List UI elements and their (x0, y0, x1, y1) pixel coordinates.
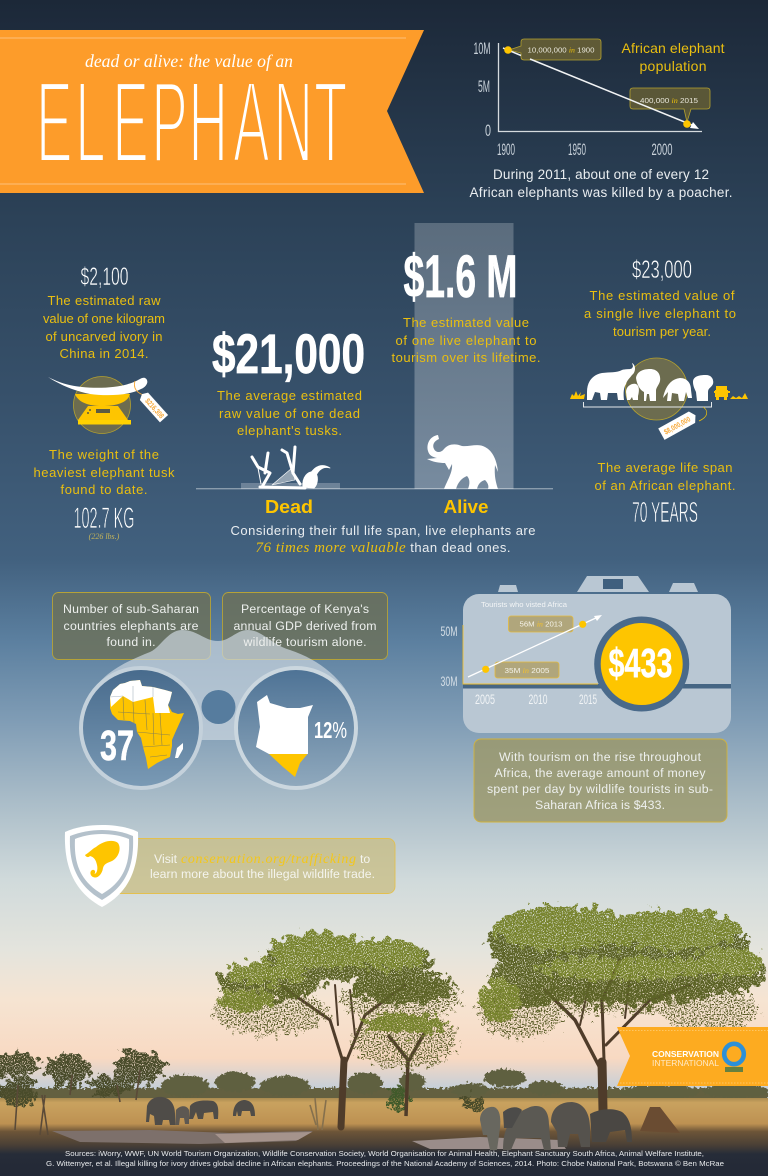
spending text (487, 750, 713, 812)
panel: tourism value column: 70 YEARS (632, 497, 698, 529)
y axis labels (440, 623, 458, 689)
callout text: Kenya GDP (234, 602, 376, 649)
map: Kenya (256, 695, 313, 777)
call to action (65, 825, 395, 907)
comparison statement: Considering their full life span, live elephants are (230, 523, 536, 538)
callout text: countries: countries elephants are (64, 619, 199, 633)
y axis labels: 10M (474, 39, 490, 58)
description: The average estimated (217, 388, 362, 403)
icon: shield with elephant head (65, 825, 138, 907)
baseline (196, 488, 553, 489)
poaching statement: During 2011, about one of every 12 (493, 167, 709, 182)
bridge hinge (202, 690, 236, 724)
link text (150, 852, 375, 881)
banner inner rule lines (0, 38, 406, 184)
life span description: The average life span (598, 460, 732, 475)
data points (482, 621, 586, 673)
unit conversion: (226 lbs.) (89, 532, 120, 541)
x axis labels: 2000 (652, 140, 672, 159)
chart title: population (640, 58, 706, 74)
ivory description: of uncarved ivory in (46, 329, 162, 344)
termite mound (640, 1107, 680, 1133)
icon: tusk on a scale with price tag: $216,308 (143, 396, 166, 420)
data points (504, 46, 691, 128)
callout: average tourist spending (474, 739, 727, 822)
binocular body (84, 630, 355, 740)
figure: 12%: 12% (314, 717, 347, 743)
figure: $1.6 M: $1.6 M (404, 243, 518, 310)
panel: ivory value column (34, 263, 175, 541)
y axis labels: 5M (478, 77, 490, 96)
callout text: Kenya GDP: annual GDP derived from (234, 619, 376, 633)
icon: live elephant (427, 435, 498, 489)
sources: Sources: iWorry, WWF, UN World Tourism Organization, Wildlife Conservation Society, World Organisation for Animal Health, Elephant Sanctuary South Africa, Animal Welfare Institute, (65, 1149, 704, 1158)
callout box: Kenya GDP (222, 592, 388, 660)
description (392, 315, 540, 365)
callout box: countries (52, 592, 210, 660)
callout: 400,000 in 2015 (630, 88, 710, 122)
logo mark (724, 1044, 744, 1072)
ivory description (43, 293, 165, 361)
x axis labels: 2015 (579, 691, 597, 707)
tag string (699, 407, 707, 421)
description (217, 388, 362, 438)
ivory description: The estimated raw (48, 293, 161, 308)
poaching statement: African elephants was killed by a poacher. (470, 185, 732, 200)
grass (570, 391, 748, 399)
figure: $21,000: $21,000 (212, 322, 365, 385)
description: of one live elephant to (396, 333, 536, 348)
chart title: Tourists who visted Africa (481, 600, 568, 609)
description: tourism per year. (613, 324, 711, 339)
description: a single live elephant to (584, 306, 736, 321)
tusk weight description: heaviest elephant tusk (34, 465, 175, 480)
callout text: countries (63, 602, 199, 649)
ground (0, 1098, 768, 1176)
spending text: Saharan Africa is $433. (535, 798, 665, 812)
decline line with arrow (503, 48, 699, 129)
y axis labels: 50M (440, 623, 458, 639)
panel: live elephant value (392, 223, 540, 517)
left acacia trunk and branches (280, 985, 405, 1127)
sources: G. Wittemyer, et al. Illegal killing for ivory drives global decline in African elephants. Proceedings of the National Academy of Sciences, 2014. Photo: Chobe National Park, Botswana © Ben McRae (46, 1159, 724, 1168)
camera stripe (463, 684, 731, 688)
panel: tourism value column (570, 256, 748, 529)
short value bar (241, 483, 340, 489)
ELEPHANT headline: ELEPHANT (36, 58, 347, 188)
y axis labels: 30M (440, 673, 458, 689)
x axis labels: 1900 (497, 140, 515, 159)
panel: ivory value column: 102.7 KG (74, 502, 134, 535)
tusk weight description (34, 447, 175, 497)
label: Alive: Alive (444, 496, 488, 517)
logo: Conservation International (617, 1027, 768, 1086)
chart: African elephant population (470, 39, 732, 200)
lens with $433: $433 (608, 640, 672, 686)
poaching statement (470, 167, 732, 200)
spending text: With tourism on the rise throughout (499, 750, 702, 764)
callout: 400,000 in 2015: 400,000 in 2015 (640, 96, 698, 105)
price tag: $8,000,000 (662, 415, 692, 437)
x axis labels: 2010 (528, 691, 548, 707)
small acacia trunk (388, 1032, 425, 1116)
left foreground trees (0, 1050, 485, 1111)
callout: 56M in 2013 (508, 616, 573, 632)
tusk weight description: found to date. (60, 482, 148, 497)
comparison statement (230, 523, 536, 556)
right herd (480, 1102, 632, 1150)
label: Dead: Dead (265, 496, 313, 517)
figure: $23,000: $23,000 (632, 256, 692, 284)
icon: elephant herd with price tag (570, 358, 748, 440)
elephants at the water hole (146, 1097, 632, 1150)
callout: 35M in 2005: 35M in 2005 (504, 666, 550, 675)
description: The estimated value (403, 315, 529, 330)
photo: savanna landscape with acacia trees and elephants (0, 906, 768, 1176)
callout: 35M in 2005 (495, 662, 559, 678)
logo wordmark (652, 1049, 719, 1068)
chart title (622, 40, 725, 74)
callout: 56M in 2013: 56M in 2013 (520, 620, 562, 628)
callout text: Kenya GDP: Percentage of Kenya's (241, 602, 369, 616)
icon: elephant skeleton (252, 447, 330, 488)
acacia canopies (217, 906, 766, 1035)
description: tourism over its lifetime. (392, 350, 540, 365)
description: elephant's tusks. (237, 423, 342, 438)
distant tree line (0, 1069, 768, 1102)
callout text: countries: Number of sub-Saharan (63, 602, 199, 616)
link box (112, 838, 395, 894)
safari vehicle (714, 386, 730, 400)
camera body (463, 594, 731, 733)
figure: 37 countries: 37 (100, 722, 134, 770)
tall value column (414, 223, 514, 489)
logo wordmark: INTERNATIONAL (652, 1058, 719, 1068)
title banner (0, 30, 424, 193)
callout text: countries: found in. (106, 635, 156, 649)
tusk weight description: The weight of the (49, 447, 159, 462)
callout: 10,000,000 in 1900 (509, 39, 601, 60)
map: Africa (110, 680, 184, 769)
logo wordmark: CONSERVATION (652, 1049, 719, 1059)
x axis labels (497, 140, 672, 159)
spending text: spent per day by wildlife tourists in sub- (487, 782, 713, 796)
left lens ring (81, 668, 201, 788)
link text: learn more about the illegal wildlife trade. (150, 867, 375, 881)
right lens ring (236, 668, 356, 788)
link text: to (360, 852, 370, 866)
right acacia trunk and branches (545, 960, 690, 1110)
ivory description: China in 2014. (60, 346, 148, 361)
spending text: Africa, the average amount of money (494, 766, 706, 780)
description: raw value of one dead (219, 406, 360, 421)
trend arrow (468, 615, 602, 677)
y axis labels (474, 39, 491, 140)
acacia wispy fringes (212, 980, 758, 1068)
link text: Visit (154, 852, 178, 866)
description: The estimated value of (590, 288, 735, 303)
callout text: Kenya GDP: wildlife tourism alone. (242, 635, 366, 649)
elephants (587, 363, 713, 401)
link text: conservation.org/trafficking (181, 852, 356, 867)
x axis labels (475, 691, 597, 707)
figure: $2,100: $2,100 (80, 263, 128, 291)
subtitle: dead or alive: the value of an (85, 51, 293, 71)
x axis labels: 2005 (475, 691, 495, 707)
water pools (52, 1130, 566, 1149)
icon: tusk on a scale with price tag (48, 376, 168, 434)
panel: dead elephant value (212, 322, 365, 517)
x axis labels: 1950 (568, 140, 586, 159)
lens with $433 (594, 616, 689, 712)
ivory description: value of one kilogram (43, 311, 165, 326)
left herd (146, 1097, 255, 1125)
panel: camera tourism chart (440, 576, 731, 733)
life span description (594, 460, 736, 493)
life span description: of an African elephant. (594, 478, 736, 493)
camera top buttons (498, 576, 698, 592)
description (584, 288, 736, 339)
viewfinder window (603, 579, 623, 589)
sources (46, 1149, 724, 1168)
callout: 10,000,000 in 1900: 10,000,000 in 1900 (528, 46, 594, 54)
axes (498, 43, 702, 132)
panel: binoculars (52, 592, 388, 788)
chart title: African elephant (622, 40, 725, 56)
bare shrubs and trunks (15, 1070, 326, 1135)
y axis labels: 0 (485, 121, 491, 140)
bracket (584, 402, 712, 407)
comparison statement: 76 times more valuable than dead ones. (256, 540, 510, 556)
yellow axis (463, 625, 598, 684)
